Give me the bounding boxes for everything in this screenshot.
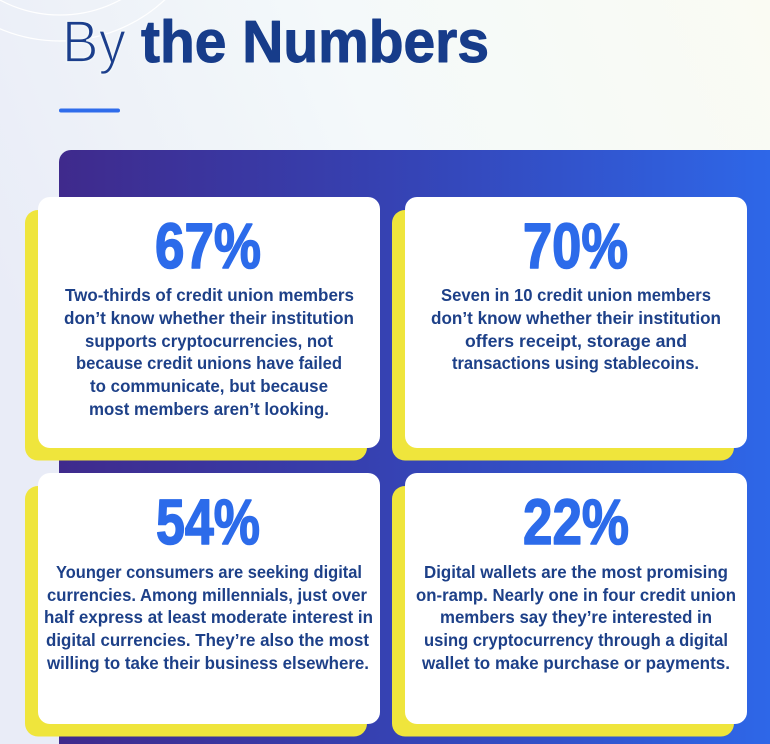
description: Younger consumers are seeking digital bbox=[56, 562, 362, 582]
panel: 54% stat card bbox=[25, 473, 380, 736]
title accent line bbox=[59, 108, 120, 112]
description: half express at least moderate interest in bbox=[44, 607, 373, 627]
panel: 67% stat card bbox=[25, 197, 380, 460]
title: By bbox=[62, 9, 126, 75]
card shadow: yellow bbox=[392, 210, 734, 460]
description: members say they’re interested in bbox=[440, 607, 712, 627]
card shadow: yellow bbox=[392, 486, 734, 736]
panel: gradient background bbox=[59, 150, 770, 744]
description: don’t know whether their institution bbox=[64, 308, 354, 328]
description: transactions using stablecoins. bbox=[452, 353, 699, 373]
decorative concentric circles bbox=[0, 0, 214, 41]
description: because credit unions have failed bbox=[76, 353, 342, 373]
description: don’t know whether their institution bbox=[431, 308, 721, 328]
stat: 54%: 54% bbox=[156, 486, 260, 558]
stat: 70%: 70% bbox=[523, 210, 628, 282]
description bbox=[44, 562, 373, 673]
description bbox=[64, 285, 354, 419]
description: to communicate, but because bbox=[90, 376, 328, 396]
description: supports cryptocurrencies, not bbox=[85, 331, 333, 351]
panel: 22% stat card bbox=[392, 473, 747, 736]
stat: 67%: 67% bbox=[155, 210, 261, 282]
title: the Numbers bbox=[141, 9, 489, 75]
card: white bbox=[38, 473, 380, 724]
panel: 70% stat card bbox=[392, 197, 747, 460]
description: digital currencies. They’re also the most bbox=[46, 630, 369, 650]
card: white bbox=[38, 197, 380, 448]
description: Digital wallets are the most promising bbox=[424, 562, 728, 582]
description: currencies. Among millennials, just over bbox=[47, 585, 367, 605]
description: Seven in 10 credit union members bbox=[441, 285, 711, 305]
card shadow: yellow bbox=[25, 210, 367, 460]
description bbox=[431, 285, 721, 373]
description: wallet to make purchase or payments. bbox=[421, 653, 730, 673]
description: Two-thirds of credit union members bbox=[65, 285, 354, 305]
card: white bbox=[405, 473, 747, 724]
description: using cryptocurrency through a digital bbox=[424, 630, 728, 650]
description: willing to take their business elsewhere. bbox=[46, 653, 369, 673]
stat: 22%: 22% bbox=[523, 486, 629, 558]
description: most members aren’t looking. bbox=[89, 399, 329, 419]
description bbox=[416, 562, 736, 673]
description: offers receipt, storage and bbox=[465, 331, 687, 351]
card shadow: yellow bbox=[25, 486, 367, 736]
card: white bbox=[405, 197, 747, 448]
description: on-ramp. Nearly one in four credit union bbox=[416, 585, 736, 605]
